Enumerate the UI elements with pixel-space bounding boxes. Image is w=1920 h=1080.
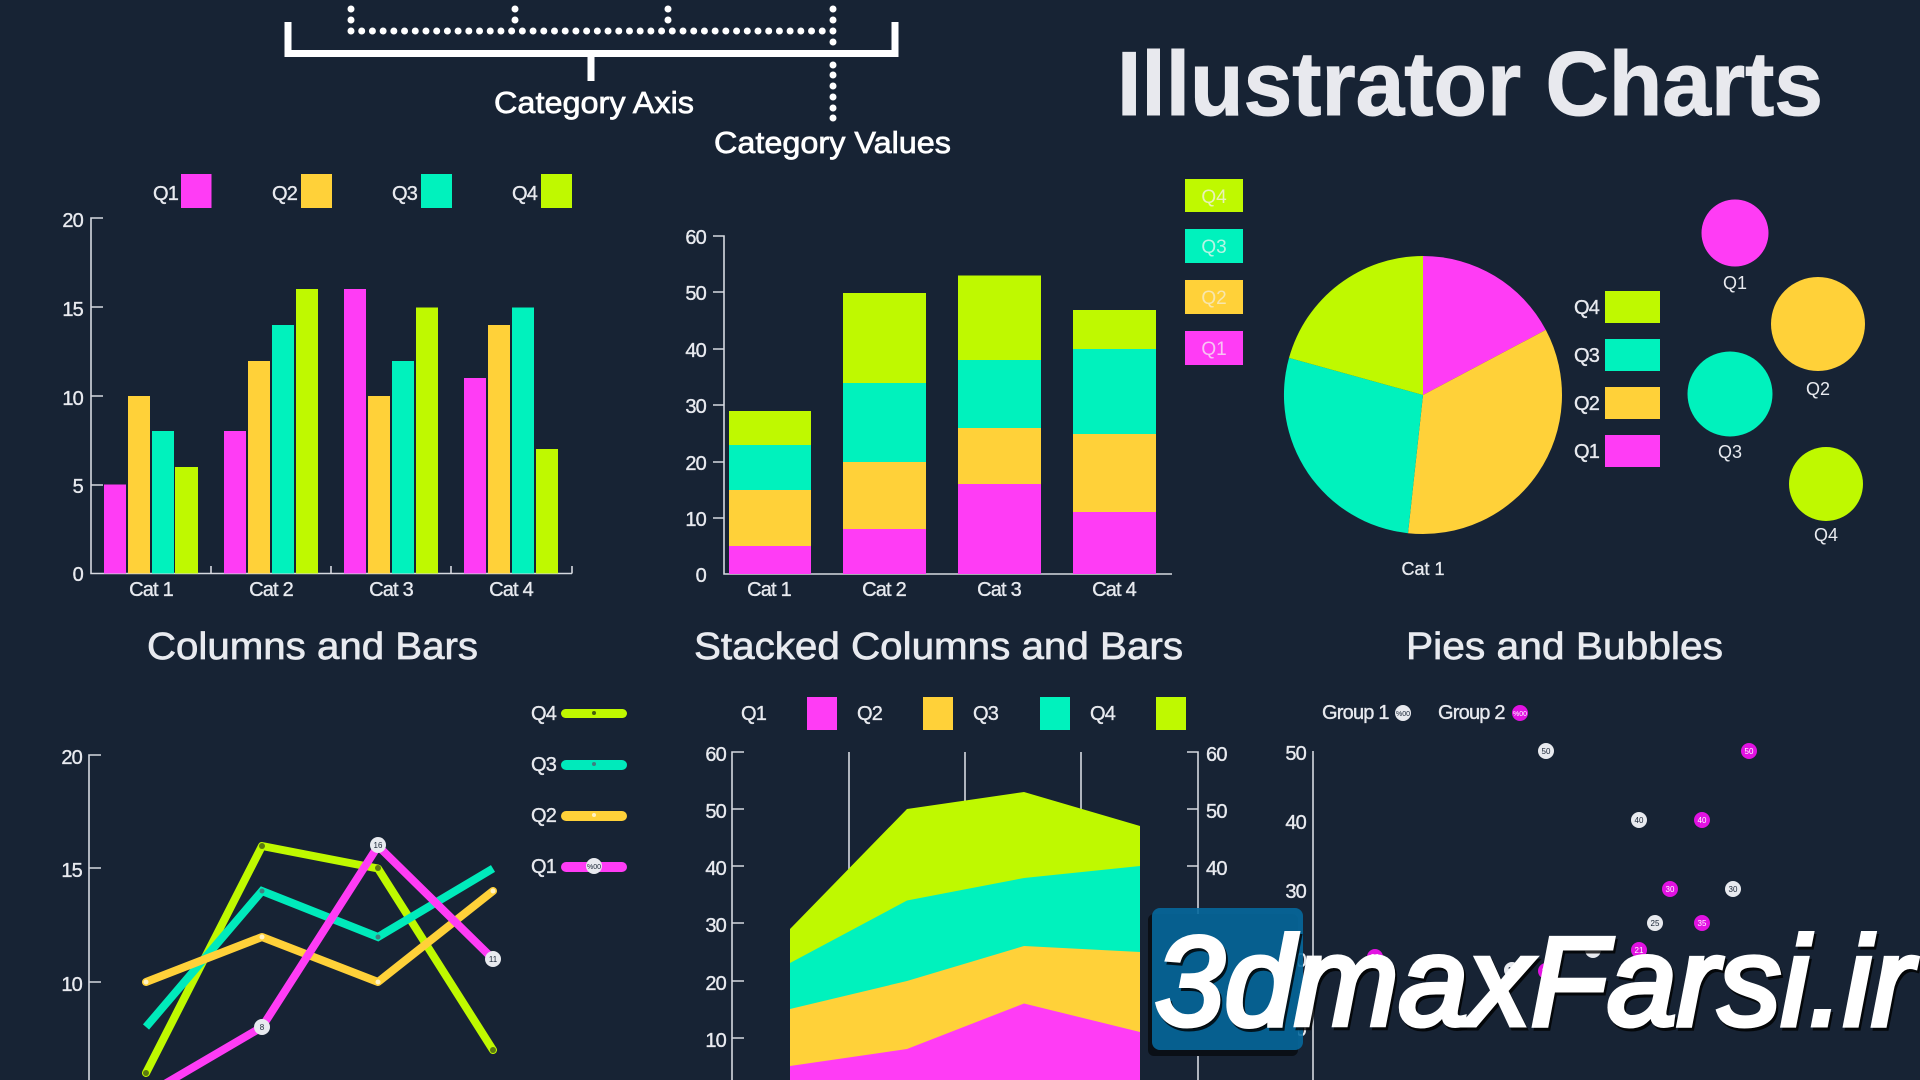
line: Q4 xyxy=(146,846,493,1073)
axis labels: 60 xyxy=(685,227,707,249)
axis labels: 30 xyxy=(705,915,727,937)
legend: area: Q2 xyxy=(857,703,883,725)
legend: area: Q1 xyxy=(741,703,767,725)
axis labels: 40 xyxy=(685,340,707,362)
label: category axis: Category Axis xyxy=(494,85,694,120)
legend: lines xyxy=(531,703,627,878)
legend: scatter: %00 xyxy=(1513,711,1527,718)
axis labels: 20 xyxy=(705,973,727,995)
legend: columns xyxy=(153,174,572,208)
legend: pie: Q4 xyxy=(1574,297,1600,319)
title: Illustrator Charts xyxy=(1117,34,1823,135)
pie label: Cat 1 xyxy=(1401,559,1445,579)
chart: bubbles: Q2 xyxy=(1806,379,1830,399)
group 2 points: 40 xyxy=(1698,816,1707,825)
chart: bubbles xyxy=(1688,200,1865,545)
chart: columns and bars xyxy=(62,174,572,601)
axis labels: 5 xyxy=(73,476,84,498)
legend: scatter: Group 2 xyxy=(1438,702,1505,724)
markers xyxy=(143,837,501,1076)
legend: pie: Q1 xyxy=(1574,441,1600,463)
axis labels: 20 xyxy=(62,210,84,232)
legend: scatter: %00 xyxy=(1396,711,1410,718)
legend: pie xyxy=(1574,291,1660,467)
diagram: category axis bracket xyxy=(288,6,895,122)
group 1 points: 50 xyxy=(1542,747,1551,756)
chart: lines xyxy=(61,747,501,1080)
chart: bubbles: Q4 xyxy=(1814,525,1838,545)
axis labels: Cat 1 xyxy=(747,579,792,601)
group 1 points xyxy=(1377,743,1741,999)
axis labels: 30 xyxy=(1206,915,1227,937)
axis labels: 60 xyxy=(705,744,727,766)
heading: stacked columns and bars: Stacked Columns and Bars xyxy=(694,626,1183,668)
markers: 11 xyxy=(489,955,498,964)
legend: lines: Q2 xyxy=(531,805,557,827)
axis labels: 15 xyxy=(61,860,83,882)
axis labels: 20 xyxy=(1285,950,1307,972)
axis labels: 40 xyxy=(705,858,727,880)
group 1 points: 25 xyxy=(1651,919,1660,928)
axis labels xyxy=(61,747,83,996)
axis labels: Cat 3 xyxy=(977,579,1022,601)
legend: lines: Q4 xyxy=(531,703,557,725)
axis labels: 10 xyxy=(1206,1030,1227,1052)
chart: stacked area xyxy=(705,744,1227,1080)
axis labels xyxy=(705,744,1227,1052)
group 2 points: 30 xyxy=(1666,885,1675,894)
legend: lines: Q3 xyxy=(531,754,557,776)
axis labels: 20 xyxy=(685,453,707,475)
axis labels: 15 xyxy=(62,299,84,321)
group 1 points: 19 xyxy=(1508,966,1517,975)
chart: pie xyxy=(1284,256,1562,579)
line: Q2 xyxy=(146,891,493,982)
axis labels: 0 xyxy=(73,564,84,586)
axis labels: 0 xyxy=(696,565,707,587)
legend: lines: %00 xyxy=(587,864,601,871)
legend: stacked xyxy=(1185,179,1243,365)
group 1 points: 30 xyxy=(1729,885,1738,894)
axis labels xyxy=(1285,743,1307,1041)
axis labels: 50 xyxy=(705,801,727,823)
axis labels: Cat 4 xyxy=(489,579,534,601)
group 1 points: 40 xyxy=(1635,816,1644,825)
axis labels: 40 xyxy=(1285,812,1307,834)
group 2 points: 19 xyxy=(1542,967,1551,976)
axis labels xyxy=(685,227,1137,601)
legend: stacked: Q3 xyxy=(1201,237,1227,258)
watermark: 3dmaxFarsi.ir xyxy=(1155,911,1918,1052)
legend: area: Q3 xyxy=(973,703,999,725)
axis labels: 40 xyxy=(1206,858,1227,880)
chart: bubbles: Q1 xyxy=(1723,273,1747,293)
axis labels: 50 xyxy=(1285,743,1307,765)
legend: area xyxy=(741,697,1186,730)
group 2 points: 50 xyxy=(1745,747,1754,756)
label: category values: Category Values xyxy=(714,125,951,160)
legend: scatter: Group 1 xyxy=(1322,702,1389,724)
legend: scatter xyxy=(1322,702,1528,724)
legend: pie: Q3 xyxy=(1574,345,1600,367)
group 2 points xyxy=(1367,743,1757,979)
group 2 points: 35 xyxy=(1698,919,1707,928)
axis labels: Cat 1 xyxy=(129,579,174,601)
heading: columns and bars: Columns and Bars xyxy=(147,626,478,668)
legend: stacked: Q4 xyxy=(1201,187,1227,208)
axis labels: Cat 4 xyxy=(1092,579,1137,601)
axis labels: 10 xyxy=(61,974,83,996)
legend: area: Q4 xyxy=(1090,703,1116,725)
legend: columns: Q2 xyxy=(272,183,298,205)
axis labels: 30 xyxy=(685,396,707,418)
areas xyxy=(790,792,1140,1080)
axis labels: 50 xyxy=(1206,801,1227,823)
axis labels: 20 xyxy=(1206,973,1227,995)
axis labels: 10 xyxy=(705,1030,727,1052)
legend: columns: Q3 xyxy=(392,183,418,205)
legend: columns: Q4 xyxy=(512,183,538,205)
axis labels: 10 xyxy=(1285,1019,1307,1041)
line: Q3 xyxy=(146,868,493,1027)
axis labels: 50 xyxy=(685,283,707,305)
columns xyxy=(104,289,558,574)
markers: 16 xyxy=(374,841,383,850)
axis labels: 10 xyxy=(685,509,707,531)
watermark: 3dmaxFarsi.ir xyxy=(1157,914,1920,1055)
dotted category values xyxy=(348,6,836,122)
axis labels: 20 xyxy=(61,747,83,769)
axis labels: 10 xyxy=(62,388,84,410)
axis labels: Cat 2 xyxy=(249,579,294,601)
legend: stacked: Q1 xyxy=(1201,339,1227,360)
heading: pies and bubbles: Pies and Bubbles xyxy=(1406,626,1723,668)
markers: 8 xyxy=(260,1023,265,1032)
chart: scatter xyxy=(1285,743,1757,1080)
stacks xyxy=(729,276,1156,574)
legend: columns: Q1 xyxy=(153,183,179,205)
legend: lines: Q1 xyxy=(531,856,557,878)
line: Q1 xyxy=(146,846,493,1080)
axis labels: 30 xyxy=(1285,881,1307,903)
axis labels: 60 xyxy=(1206,744,1227,766)
group 2 points: 20 xyxy=(1371,953,1380,962)
axis labels: Cat 3 xyxy=(369,579,414,601)
group 2 points: 21 xyxy=(1635,946,1644,955)
axis labels xyxy=(62,210,534,601)
legend: pie: Q2 xyxy=(1574,393,1600,415)
axis labels: Cat 2 xyxy=(862,579,907,601)
chart: bubbles: Q3 xyxy=(1718,442,1742,462)
chart: stacked columns xyxy=(685,179,1243,601)
legend: stacked: Q2 xyxy=(1201,288,1227,309)
